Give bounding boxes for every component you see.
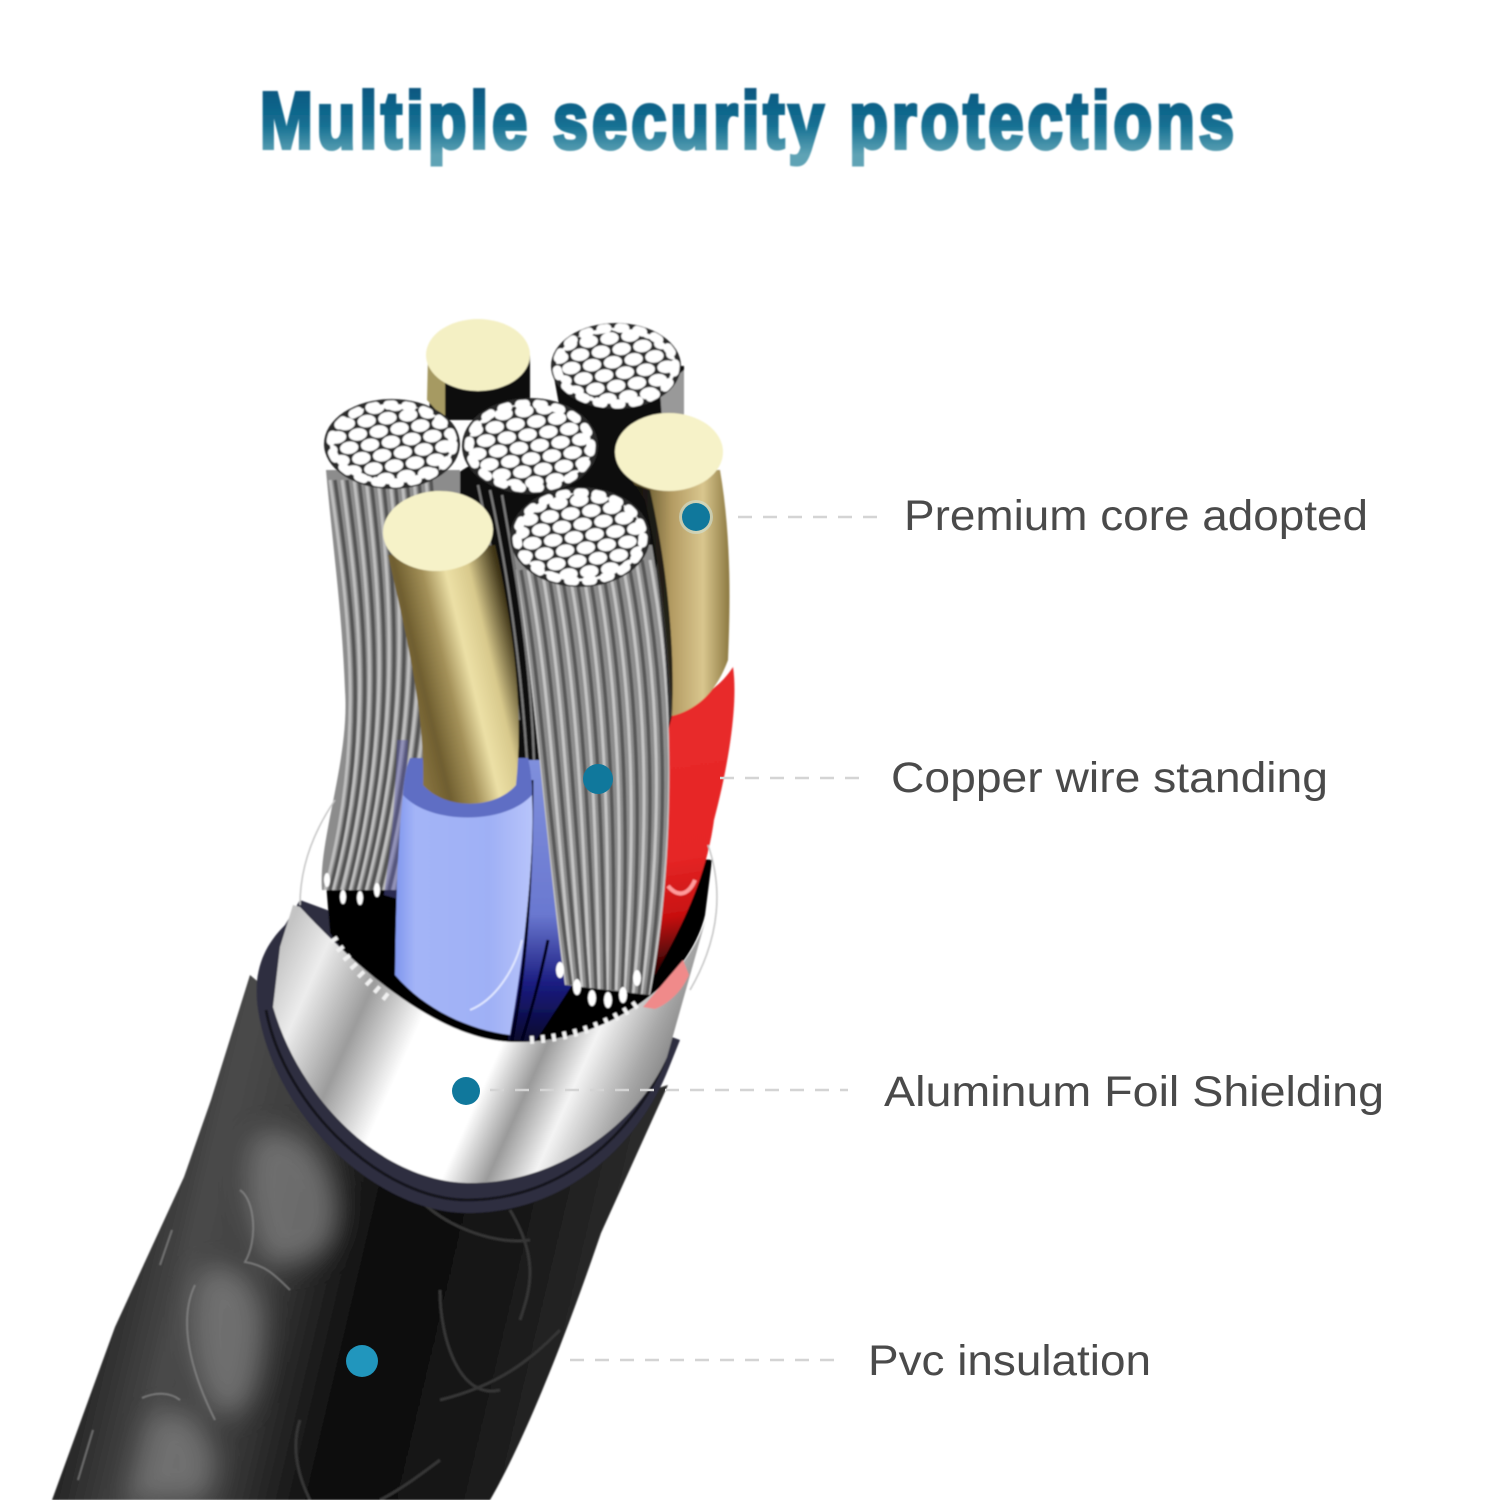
blue-violet sheath behind silver strand <box>508 760 572 1042</box>
callout: PVC insulation <box>346 1337 1151 1385</box>
left silver strand <box>322 399 460 905</box>
back core: silver strands <box>430 323 684 830</box>
callout: premium core: Premium core adopted <box>904 492 1368 540</box>
front gold core with blue insulation <box>381 488 533 1035</box>
title: Multiple security protections <box>260 76 1238 165</box>
callout: copper wire: Copper wire standing <box>891 754 1328 802</box>
back core: gold <box>426 319 530 420</box>
PVC jacket <box>52 975 668 1500</box>
navy dark lines <box>512 780 548 1040</box>
front silver strand <box>510 487 676 1008</box>
callout: aluminium foil: Aluminum Foil Shielding <box>884 1068 1384 1116</box>
foil flange outline <box>300 800 717 990</box>
aluminium foil shield <box>273 905 707 1183</box>
cable illustration <box>52 319 734 1500</box>
right core: gold with red sheath <box>615 413 734 975</box>
dark rubber ring <box>257 900 680 1213</box>
black cavity <box>326 850 712 1042</box>
centre back strand face <box>462 398 598 494</box>
callout: PVC insulation: Pvc insulation <box>868 1337 1151 1385</box>
callout: copper wire <box>583 754 1328 802</box>
ring highlight line <box>266 1010 664 1200</box>
callout: aluminium foil <box>452 1068 1384 1116</box>
callout: premium core <box>679 492 1368 540</box>
pink reflection in shield <box>643 960 689 1009</box>
